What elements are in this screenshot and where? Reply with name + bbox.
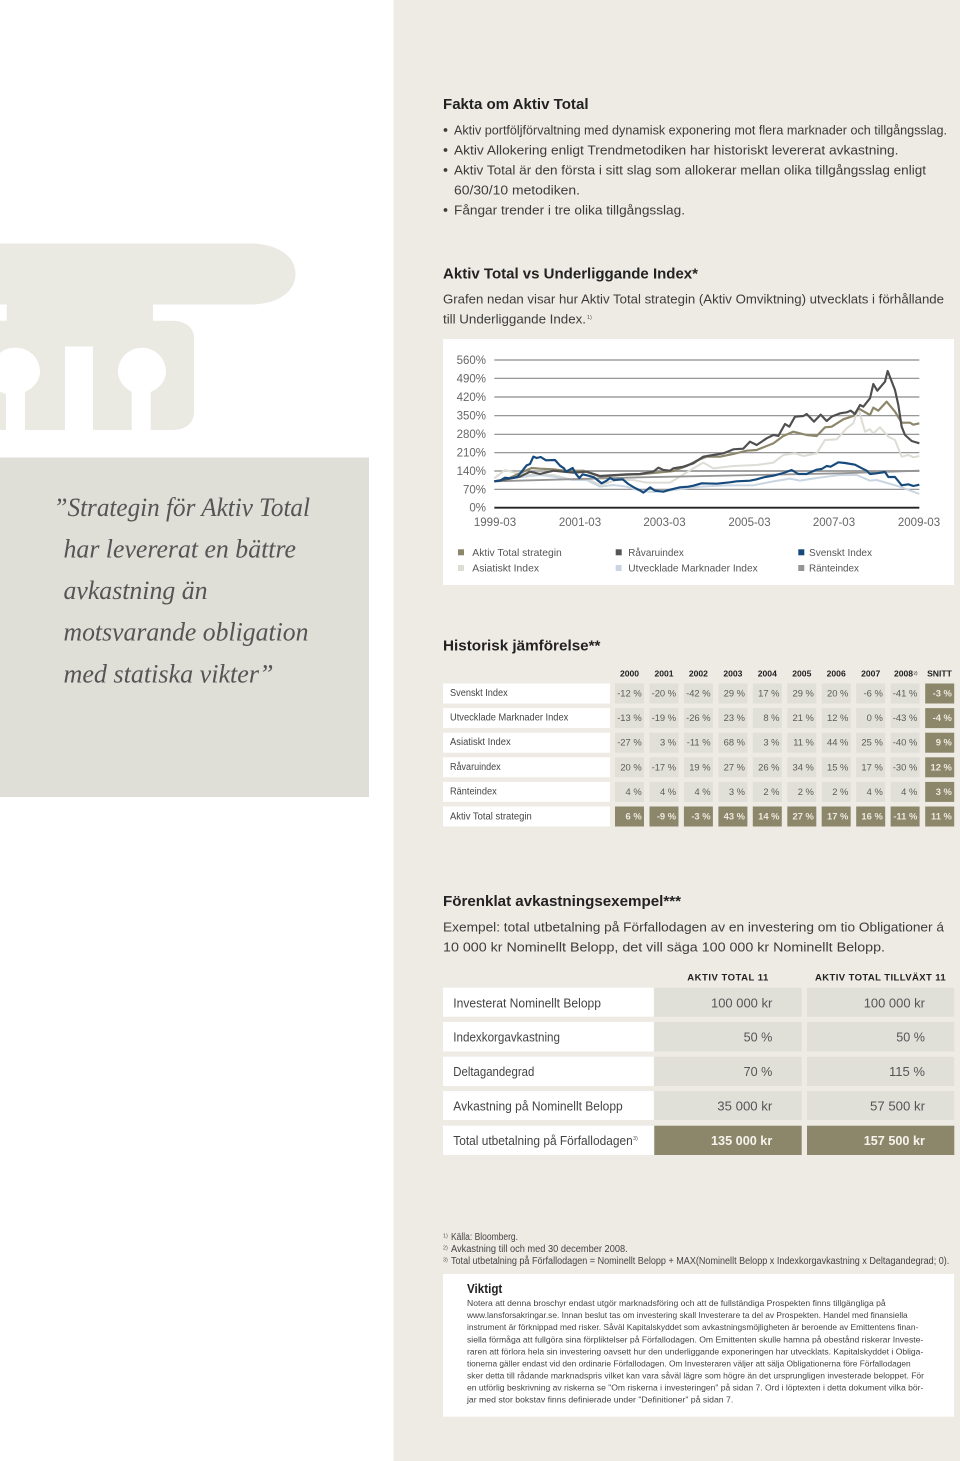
disclaimer text: tionerna gäller endast vid den ordinarie Förfallodagen. Om Investeraren väljer att sälja Obligationerna före Förfallodagen <box>467 1358 911 1368</box>
row: Total utbetalning: 135 000 kr <box>711 1133 772 1148</box>
table row: Asiatiskt Index: 9 % <box>936 737 953 748</box>
heading: Fakta om Aktiv Total <box>443 96 588 113</box>
table row: Asiatiskt Index <box>443 733 954 753</box>
x axis labels: 2007-03 <box>813 517 855 529</box>
line chart <box>494 360 919 508</box>
row: Total utbetalning <box>443 1126 954 1155</box>
y axis labels: 0% <box>469 503 486 515</box>
table row: Ränteindex: 2 % <box>798 786 814 797</box>
table row: Svenskt Index: 29 % <box>724 688 745 698</box>
row: Avkastning på Nominellt Belopp: 57 500 kr <box>870 1098 926 1114</box>
row: Avkastning på Nominellt Belopp <box>443 1091 954 1120</box>
disclaimer text: instrument är förknippad med risker. Såväl Kapitalskyddet som avkastningsmöjligheten är beroende av Emittentens finan- <box>467 1322 918 1332</box>
row: Deltagandegrad: 115 % <box>889 1064 925 1079</box>
table header years: 2008 <box>894 669 913 679</box>
legend: Utvecklade Marknader Index <box>628 563 758 574</box>
section: Förenklat avkastningsexempel <box>443 893 954 1155</box>
legend: Svenskt Index <box>809 548 873 559</box>
row: Indexkorgavkastning: 50 % <box>896 1030 925 1044</box>
row: Avkastning på Nominellt Belopp: 35 000 kr <box>717 1098 773 1114</box>
bullet list: Fångar trender i tre olika tillgångsslag. <box>454 202 685 217</box>
table row: Råvaruindex: 34 % <box>793 761 814 772</box>
table row: Asiatiskt Index: 44 % <box>827 737 848 748</box>
quote text: har levererat en bättre <box>64 534 296 563</box>
panel: Viktigt <box>443 1274 954 1417</box>
y axis labels: 420% <box>457 392 486 404</box>
row: Indexkorgavkastning <box>443 1022 954 1052</box>
x axis labels: 1999-03 <box>474 517 516 529</box>
table row: Svenskt Index: -6 % <box>864 688 883 698</box>
footnotes: Avkastning till och med 30 december 2008. <box>451 1244 628 1255</box>
table row: Råvaruindex: 19 % <box>689 761 711 772</box>
table row: Råvaruindex: 20 % <box>620 761 642 772</box>
table row: Utvecklade Marknader Index: -13 % <box>617 712 642 723</box>
table row: Ränteindex: 2 % <box>763 786 780 797</box>
table row: Aktiv Total strategin: -9 % <box>657 810 677 822</box>
table row: Aktiv Total strategin: 16 % <box>861 810 883 822</box>
y axis labels: 560% <box>457 355 486 367</box>
table row: Ränteindex: 2 % <box>832 786 848 797</box>
disclaimer text: raren att förlora hela sin investering oavsett hur den underliggande exponeringen har utvecklats. Kapitalskyddet i Obliga- <box>467 1346 923 1356</box>
disclaimer text: jar med stor bokstav finns definierade under "Definitioner" på sidan 7. <box>466 1395 733 1405</box>
table row: Ränteindex: 3 % <box>729 786 745 797</box>
table row: Utvecklade Marknader Index: Utvecklade Marknader Index <box>450 713 568 724</box>
table row: Råvaruindex: 15 % <box>827 761 848 772</box>
table row: Aktiv Total strategin: 17 % <box>827 810 849 822</box>
table row: Aktiv Total strategin: Aktiv Total strategin <box>450 811 532 822</box>
table row: Råvaruindex: -30 % <box>893 761 917 772</box>
disclaimer text: siella förmåga att fullgöra sina förpliktelser på Förfallodagen. Om Emittenten skulle hamna på obestånd riskerar Investe- <box>467 1334 923 1344</box>
intro text: till Underliggande Index. <box>443 311 586 326</box>
table header years: 2006 <box>827 669 846 679</box>
table row: Svenskt Index: -20 % <box>652 688 676 698</box>
table row: Ränteindex: 3 % <box>936 786 953 797</box>
table row: Ränteindex: 4 % <box>660 786 676 797</box>
x axis labels <box>474 517 940 529</box>
heading: Förenklat avkastningsexempel*** <box>443 893 681 910</box>
x axis labels: 2001-03 <box>559 517 601 529</box>
table row: Råvaruindex: Råvaruindex <box>450 761 501 773</box>
table row: Aktiv Total strategin: -3 % <box>691 810 711 822</box>
legend: Råvaruindex <box>628 547 685 559</box>
table row: Råvaruindex: -17 % <box>652 761 676 772</box>
table row: Svenskt Index: 17 % <box>758 688 780 698</box>
row: Deltagandegrad: 70 % <box>744 1064 773 1079</box>
row: Investerat Nominellt Belopp: 100 000 kr <box>864 996 926 1010</box>
table row: Asiatiskt Index: 3 % <box>763 737 780 748</box>
intro text <box>443 291 944 326</box>
y axis labels <box>457 355 486 515</box>
intro text: 1) <box>587 315 592 321</box>
row: Investerat Nominellt Belopp: 100 000 kr <box>711 996 773 1010</box>
legend <box>458 547 873 574</box>
table header years: 2002 <box>689 669 708 679</box>
disclaimer text: www.lansforsakringar.se. Innan beslut tas om investering skall Investerare ta del av Prospekten. Handel med finansiella <box>466 1310 908 1320</box>
table row: Svenskt Index: 29 % <box>793 688 814 698</box>
panel: chart <box>443 339 954 585</box>
table row: Asiatiskt Index: 25 % <box>861 737 883 748</box>
icon: decorative logo shape <box>0 244 296 430</box>
quote text: ”Strategin för Aktiv Total <box>54 493 310 522</box>
row: Investerat Nominellt Belopp <box>443 988 954 1017</box>
legend: Aktiv Total strategin <box>472 548 562 559</box>
table row: Utvecklade Marknader Index <box>443 708 954 728</box>
row: Total utbetalning: 157 500 kr <box>864 1133 925 1148</box>
disclaimer text: sker detta till rådande marknadspris vilket kan vara såväl lägre som högre än det ursprungligen investerade beloppet. För <box>467 1370 924 1380</box>
y axis labels: 210% <box>457 448 486 460</box>
section: Historisk jämförelse <box>443 638 954 826</box>
footnotes <box>443 1232 949 1267</box>
table row: Aktiv Total strategin: 6 % <box>626 810 642 822</box>
y axis labels: 280% <box>457 429 486 441</box>
disclaimer text: Notera att denna broschyr endast utgör marknadsföring och att de fullständiga Prospekten finns tillgängliga på <box>467 1298 886 1308</box>
row: Deltagandegrad: Deltagandegrad <box>453 1064 534 1079</box>
table row: Utvecklade Marknader Index: -4 % <box>933 712 953 723</box>
table row: Ränteindex: 4 % <box>867 786 883 797</box>
table row: Svenskt Index: 20 % <box>827 688 848 698</box>
table row: Svenskt Index: -42 % <box>686 688 711 698</box>
table row: Råvaruindex: 26 % <box>758 761 780 772</box>
table header years: 2004 <box>758 669 777 679</box>
column headers: AKTIV TOTAL 11 <box>687 972 769 984</box>
table row: Svenskt Index: -3 % <box>933 688 953 698</box>
table header years: 2003 <box>723 669 743 679</box>
bullet list: Aktiv Allokering enligt Trendmetodiken har historiskt levererat avkastning. <box>454 142 898 157</box>
right background column <box>394 0 960 1461</box>
y axis labels: 140% <box>457 466 486 478</box>
y axis labels: 490% <box>457 373 486 385</box>
intro text: Grafen nedan visar hur Aktiv Total strategin (Aktiv Omviktning) utvecklats i förhållande <box>443 291 944 306</box>
table row: Svenskt Index <box>443 684 954 704</box>
table row: Asiatiskt Index: -11 % <box>687 737 711 748</box>
bullet list <box>444 122 947 217</box>
table row: Aktiv Total strategin: 14 % <box>758 810 780 822</box>
table row: Asiatiskt Index: 11 % <box>793 737 814 748</box>
table row: Aktiv Total strategin: 43 % <box>724 810 746 822</box>
row: Indexkorgavkastning: Indexkorgavkastning <box>453 1030 560 1044</box>
table row: Råvaruindex: 17 % <box>861 761 883 772</box>
heading: Viktigt <box>467 1282 503 1296</box>
x axis labels: 2009-03 <box>898 517 940 529</box>
example text <box>443 919 945 954</box>
footnotes: Källa: Bloomberg. <box>451 1232 518 1243</box>
heading: Aktiv Total vs Underliggande Index* <box>443 265 698 282</box>
table row: Ränteindex: 4 % <box>901 786 917 797</box>
row: Total utbetalning: 3) <box>633 1136 638 1142</box>
bullet list: 60/30/10 metodiken. <box>454 182 580 197</box>
table header years: 2001 <box>654 669 674 679</box>
table row: Ränteindex: 4 % <box>626 786 642 797</box>
x axis labels: 2005-03 <box>728 517 771 529</box>
table row: Råvaruindex <box>443 757 954 777</box>
table row: Aktiv Total strategin <box>443 806 954 826</box>
table row: Aktiv Total strategin: 11 % <box>931 810 953 822</box>
table row: Ränteindex <box>443 782 954 802</box>
legend: Ränteindex <box>809 563 860 574</box>
row: Investerat Nominellt Belopp: Investerat Nominellt Belopp <box>453 996 601 1010</box>
quote text: med statiska vikter” <box>64 659 274 688</box>
column headers <box>687 972 946 984</box>
disclaimer text <box>466 1298 924 1405</box>
table row: Råvaruindex: 27 % <box>724 761 745 772</box>
row: Indexkorgavkastning: 50 % <box>744 1030 773 1044</box>
table row: Ränteindex: 4 % <box>694 786 711 797</box>
section: Aktiv Total vs Underliggande Index <box>443 265 944 326</box>
column headers: AKTIV TOTAL TILLVÄXT 11 <box>815 972 946 984</box>
row: Deltagandegrad <box>443 1057 954 1086</box>
table row: Asiatiskt Index: 68 % <box>724 737 745 748</box>
heading: Historisk jämförelse** <box>443 638 601 655</box>
x axis labels: 2003-03 <box>643 517 686 529</box>
table header years <box>620 669 953 679</box>
table row: Asiatiskt Index: -40 % <box>893 737 917 748</box>
table row: Utvecklade Marknader Index: 21 % <box>793 712 814 723</box>
table row: Aktiv Total strategin: -11 % <box>893 810 918 822</box>
bullet list: Aktiv portföljförvaltning med dynamisk exponering mot flera marknader och tillgångsslag. <box>454 122 947 137</box>
table row: Asiatiskt Index: Asiatiskt Index <box>450 737 511 748</box>
section: Fakta om Aktiv Total <box>443 96 947 217</box>
table row: Utvecklade Marknader Index: -43 % <box>893 712 917 723</box>
table header years: 2007 <box>861 669 880 679</box>
table header years: 2005 <box>792 669 812 679</box>
disclaimer text: en utförlig beskrivning av riskerna se "Om riskerna i investeringen" på sidan 7. Ord i löptexten i detta dokument vilka bör- <box>467 1383 923 1393</box>
row: Avkastning på Nominellt Belopp: Avkastning på Nominellt Belopp <box>453 1098 623 1114</box>
table row: Utvecklade Marknader Index: 12 % <box>827 712 848 723</box>
table row: Utvecklade Marknader Index: 8 % <box>763 712 780 723</box>
row: Total utbetalning: Total utbetalning på Förfallodagen <box>453 1133 633 1148</box>
table header years: 2000 <box>620 669 639 679</box>
table row: Utvecklade Marknader Index: -26 % <box>686 712 711 723</box>
panel: quote <box>0 458 369 797</box>
example text: 10 000 kr Nominellt Belopp, det vill säga 100 000 kr Nominellt Belopp. <box>443 939 885 954</box>
y axis labels: 350% <box>457 410 486 422</box>
table row: Utvecklade Marknader Index: 0 % <box>867 712 883 723</box>
table row: Utvecklade Marknader Index: -19 % <box>652 712 676 723</box>
table row: Råvaruindex: 12 % <box>931 761 953 772</box>
table row: Svenskt Index: -41 % <box>893 688 917 698</box>
footnotes: 2) <box>443 1246 448 1252</box>
table header years: 2) <box>913 670 918 676</box>
y axis labels: 70% <box>463 484 486 496</box>
table row: Ränteindex: Ränteindex <box>450 786 497 797</box>
quote text: avkastning än <box>64 576 208 605</box>
quote text: motsvarande obligation <box>64 618 308 647</box>
table row: Asiatiskt Index: 3 % <box>660 737 676 748</box>
table header years: SNITT <box>927 669 953 679</box>
footnotes: 3) <box>443 1258 448 1264</box>
table row: Aktiv Total strategin: 27 % <box>793 810 815 822</box>
example text: Exempel: total utbetalning på Förfallodagen av en investering om tio Obligationer á <box>443 919 945 934</box>
quote text <box>54 493 310 688</box>
table row: Utvecklade Marknader Index: 23 % <box>724 712 745 723</box>
table row: Svenskt Index: Svenskt Index <box>450 688 508 699</box>
table row: Asiatiskt Index: -27 % <box>617 737 642 748</box>
table row: Svenskt Index: -12 % <box>617 688 642 698</box>
footnotes: 1) <box>443 1234 448 1240</box>
bullet list: Aktiv Total är den första i sitt slag som allokerar mellan olika tillgångsslag enligt <box>454 162 926 177</box>
legend: Asiatiskt Index <box>472 563 540 574</box>
